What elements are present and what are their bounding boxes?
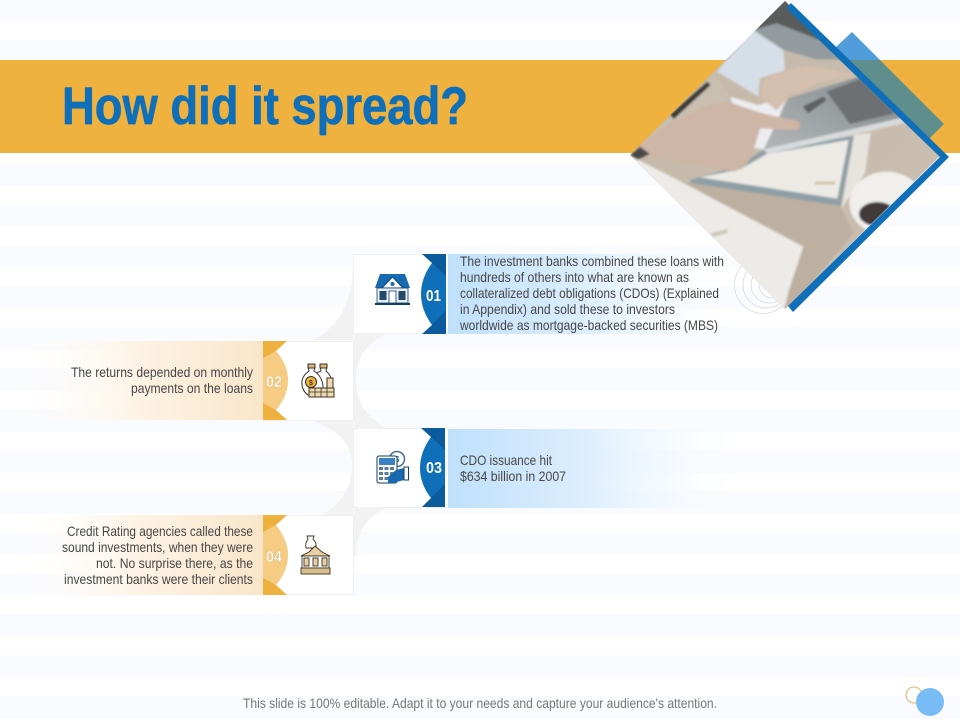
number tab 01	[421, 254, 446, 334]
corner circles	[906, 687, 944, 716]
card 03	[354, 428, 444, 508]
icon: calculator and coin: $	[395, 455, 400, 464]
photo: hands using tablet on desk	[625, 0, 945, 315]
number tab 03	[420, 428, 445, 507]
icon: money bags: $	[309, 380, 313, 387]
title banner	[0, 60, 960, 153]
number tab 02: 02	[266, 374, 282, 391]
number tab 01: 01	[426, 288, 441, 305]
text 04: not. No surprise there, as the	[96, 556, 253, 571]
card 02	[264, 342, 354, 420]
accent bar behind photo	[822, 32, 944, 148]
icon: house	[375, 274, 410, 305]
text 03: $634 billion in 2007	[460, 469, 566, 484]
grey connector ribbon	[313, 262, 386, 556]
text background 04	[14, 515, 263, 595]
text 03: CDO issuance hit	[460, 453, 552, 468]
title: How did it spread?	[62, 77, 468, 136]
icon: money bags	[302, 364, 334, 397]
text 01: collateralized debt obligations (CDOs) (Explained	[460, 286, 719, 301]
card 04	[264, 516, 354, 594]
text 01	[459, 254, 724, 333]
text background 03	[448, 429, 752, 508]
text 04	[62, 524, 253, 587]
number tab 04: 04	[266, 549, 282, 566]
text background 02	[14, 341, 263, 420]
text 01: worldwide as mortgage-backed securities (MBS)	[459, 318, 718, 333]
text 02: payments on the loans	[131, 381, 253, 396]
text 02	[71, 365, 253, 396]
text background 01	[448, 254, 744, 334]
text 03	[460, 453, 566, 484]
text 04: investment banks were their clients	[64, 572, 253, 587]
icon: bank with money bag	[301, 536, 330, 574]
footer note: This slide is 100% editable. Adapt it to your needs and capture your audience's attention.	[243, 696, 717, 711]
panel: step 02	[14, 341, 354, 420]
text 02: The returns depended on monthly	[71, 365, 253, 380]
text 04: Credit Rating agencies called these	[67, 524, 253, 539]
text 04: sound investments, when they were	[62, 540, 253, 555]
panel: step 03	[354, 428, 752, 508]
number tab 04	[263, 515, 288, 595]
icon: calculator and coin	[377, 452, 408, 483]
card 01	[354, 254, 446, 334]
text 01: The investment banks combined these loans with	[460, 254, 724, 269]
number tab 02	[263, 341, 288, 420]
blue photo frame	[786, 3, 949, 312]
text 01: in Appendix) and sold these to investors	[460, 302, 675, 317]
text 01: hundreds of others into what are known as	[460, 270, 689, 285]
concentric circles decoration	[734, 256, 792, 314]
number tab 03: 03	[426, 460, 442, 477]
panel: step 04	[14, 515, 354, 595]
panel: step 01	[354, 254, 744, 334]
